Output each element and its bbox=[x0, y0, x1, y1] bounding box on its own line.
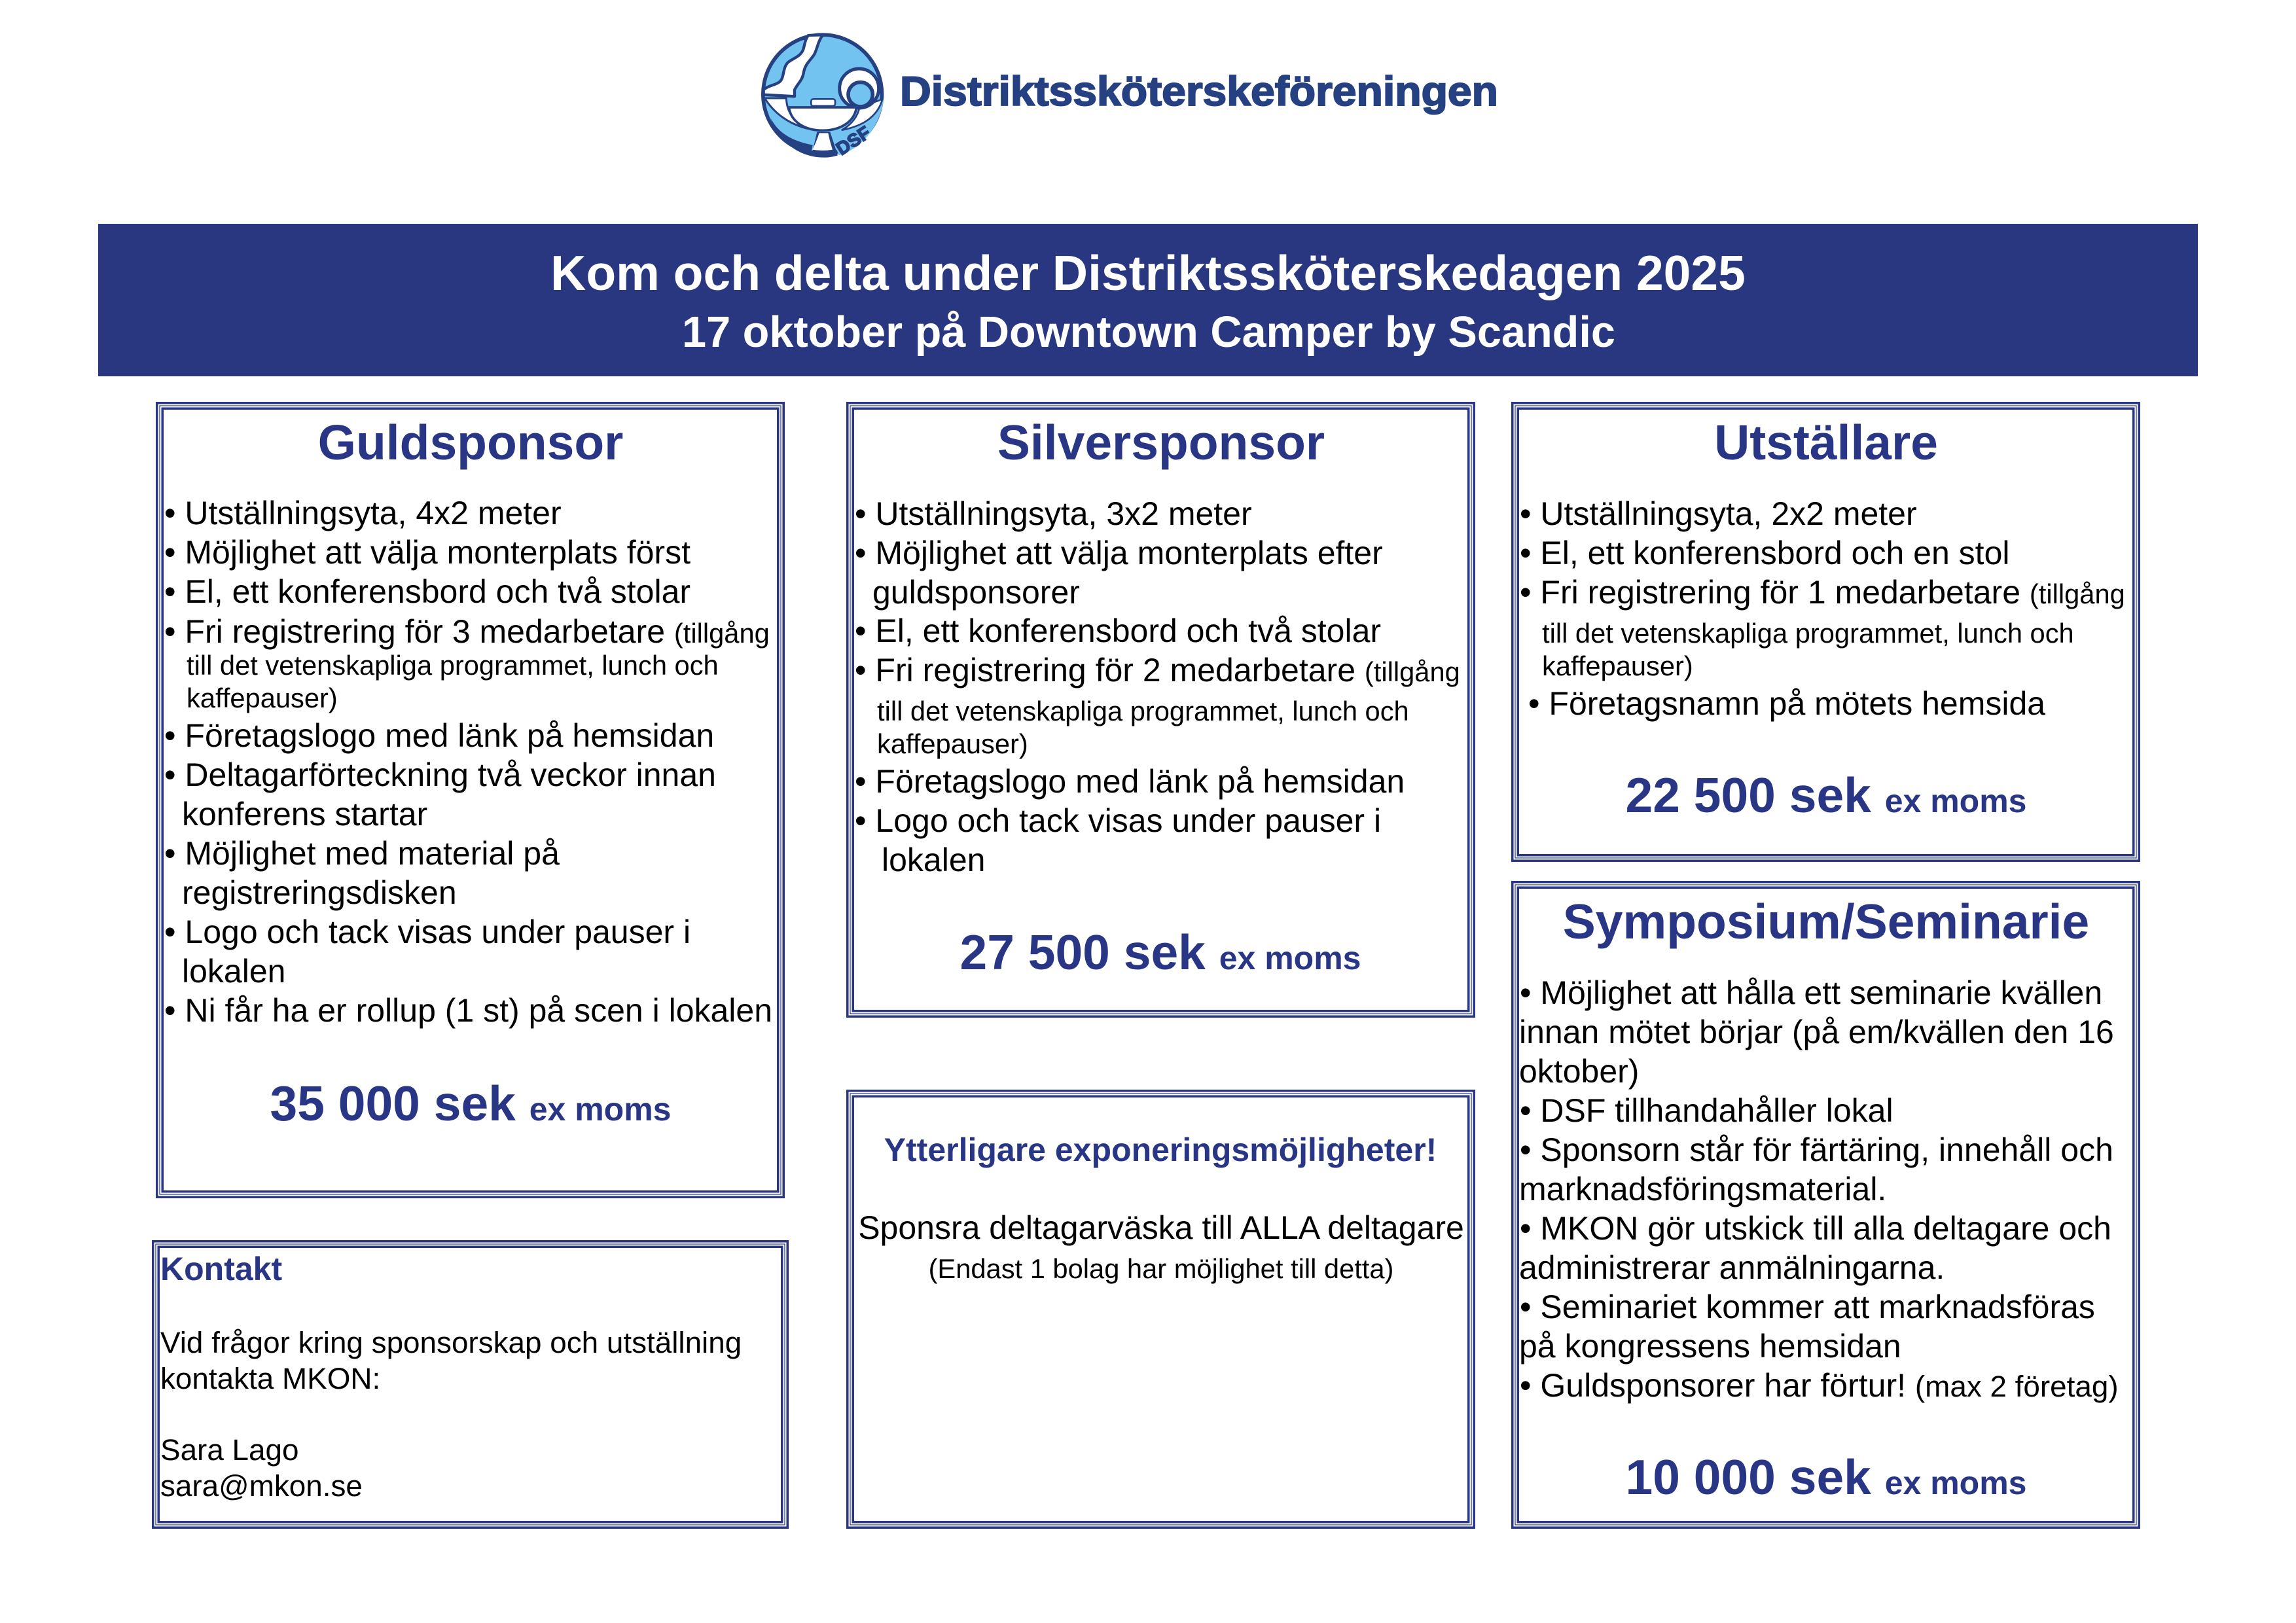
benefits list: • El, ett konferensbord och två stolar bbox=[164, 573, 691, 610]
benefits list: till det vetenskapliga programmet, lunch och bbox=[187, 650, 719, 681]
benefits list: • Logo och tack visas under pauser i bbox=[164, 914, 691, 950]
benefits list: • MKON gör utskick till alla deltagare och bbox=[1520, 1210, 2111, 1247]
title: Kom och delta under Distriktssköterskedagen 2025 bbox=[550, 245, 1746, 300]
offer text: Sponsra deltagarväska till ALLA deltagare bbox=[858, 1209, 1464, 1246]
benefits list: • Företagsnamn på mötets hemsida bbox=[1528, 685, 2045, 722]
benefits list: • Möjlighet att hålla ett seminarie kvällen bbox=[1520, 974, 2102, 1011]
benefits list: • Utställningsyta, 3x2 meter bbox=[855, 495, 1252, 532]
benefits list: konferens startar bbox=[182, 796, 427, 832]
panel: Kontakt bbox=[153, 1241, 787, 1527]
contact text bbox=[160, 1326, 742, 1503]
benefits list: • Deltagarförteckning två veckor innan bbox=[164, 757, 716, 793]
benefits list: administrerar anmälningarna. bbox=[1519, 1249, 1945, 1286]
logo: DSF emblem: DSF bbox=[833, 122, 874, 159]
subtitle: 17 oktober på Downtown Camper by Scandic bbox=[682, 308, 1615, 357]
contact text: Vid frågor kring sponsorskap och utställning bbox=[160, 1326, 742, 1359]
benefits list bbox=[855, 495, 1460, 878]
panel: Symposium/Seminarie bbox=[1513, 882, 2139, 1527]
benefits list: • Företagslogo med länk på hemsidan bbox=[164, 717, 714, 754]
heading: Ytterligare exponeringsmöjligheter! bbox=[884, 1132, 1437, 1168]
benefits list: • Utställningsyta, 2x2 meter bbox=[1520, 495, 1917, 532]
benefits list: • Möjlighet med material på bbox=[164, 835, 560, 872]
benefits list: • Fri registrering för 2 medarbetare (tillgång bbox=[855, 652, 1460, 688]
benefits list bbox=[1519, 974, 2119, 1404]
benefits list: marknadsföringsmaterial. bbox=[1519, 1171, 1886, 1207]
heading: Symposium/Seminarie bbox=[1563, 894, 2089, 949]
contact text: sara@mkon.se bbox=[160, 1469, 363, 1503]
benefits list: registreringsdisken bbox=[182, 874, 457, 911]
panel: Silversponsor bbox=[848, 403, 1474, 1016]
heading: Guldsponsor bbox=[318, 415, 623, 470]
panel: Guldsponsor bbox=[157, 403, 783, 1197]
panel: Utställare bbox=[1513, 403, 2139, 861]
note: (Endast 1 bolag har möjlighet till detta) bbox=[929, 1253, 1393, 1284]
logo: DSF emblem bbox=[761, 33, 884, 159]
benefits list: • Fri registrering för 1 medarbetare (tillgång bbox=[1520, 574, 2125, 611]
benefits list: kaffepauser) bbox=[187, 683, 338, 713]
benefits list: till det vetenskapliga programmet, lunch och bbox=[1542, 618, 2074, 649]
benefits list: till det vetenskapliga programmet, lunch och bbox=[877, 696, 1409, 726]
benefits list: kaffepauser) bbox=[1542, 651, 1693, 681]
benefits list: • Guldsponsorer har förtur! (max 2 företag) bbox=[1520, 1367, 2119, 1404]
logo wordmark: Distriktssköterskeföreningen bbox=[900, 69, 1498, 115]
title banner bbox=[98, 224, 2198, 376]
benefits list: kaffepauser) bbox=[877, 728, 1028, 759]
benefits list: • Logo och tack visas under pauser i bbox=[855, 802, 1381, 839]
heading: Kontakt bbox=[160, 1251, 282, 1287]
benefits list: • Möjlighet att välja monterplats först bbox=[164, 534, 691, 571]
benefits list: • El, ett konferensbord och en stol bbox=[1520, 535, 2009, 571]
benefits list: lokalen bbox=[182, 953, 285, 990]
contact text: kontakta MKON: bbox=[160, 1362, 380, 1395]
price: 10 000 sek ex moms bbox=[1626, 1450, 2026, 1505]
price: 22 500 sek ex moms bbox=[1626, 768, 2026, 823]
benefits list: på kongressens hemsidan bbox=[1519, 1328, 1901, 1364]
contact text: Sara Lago bbox=[160, 1433, 298, 1467]
benefits list: guldsponsorer bbox=[872, 574, 1080, 611]
benefits list bbox=[164, 495, 772, 1029]
heading: Utställare bbox=[1714, 415, 1938, 470]
benefits list: • Utställningsyta, 4x2 meter bbox=[164, 495, 562, 531]
benefits list: innan mötet börjar (på em/kvällen den 16 bbox=[1519, 1014, 2114, 1050]
benefits list: • Möjlighet att välja monterplats efter bbox=[855, 535, 1383, 571]
price: 27 500 sek ex moms bbox=[960, 925, 1361, 980]
benefits list: • Fri registrering för 3 medarbetare (tillgång bbox=[164, 613, 770, 650]
benefits list: • El, ett konferensbord och två stolar bbox=[855, 613, 1381, 649]
price: 35 000 sek ex moms bbox=[270, 1076, 672, 1131]
benefits list: • Företagslogo med länk på hemsidan bbox=[855, 763, 1405, 800]
heading: Silversponsor bbox=[997, 415, 1325, 470]
benefits list: • Ni får ha er rollup (1 st) på scen i lokalen bbox=[164, 992, 772, 1029]
benefits list bbox=[1520, 495, 2125, 722]
benefits list: lokalen bbox=[882, 842, 985, 878]
panel: Ytterligare exponeringsmöjligheter bbox=[848, 1091, 1474, 1527]
benefits list: • DSF tillhandahåller lokal bbox=[1520, 1092, 1893, 1129]
benefits list: oktober) bbox=[1519, 1053, 1639, 1090]
benefits list: • Sponsorn står för färtäring, innehåll och bbox=[1520, 1132, 2113, 1168]
benefits list: • Seminariet kommer att marknadsföras bbox=[1520, 1289, 2095, 1325]
